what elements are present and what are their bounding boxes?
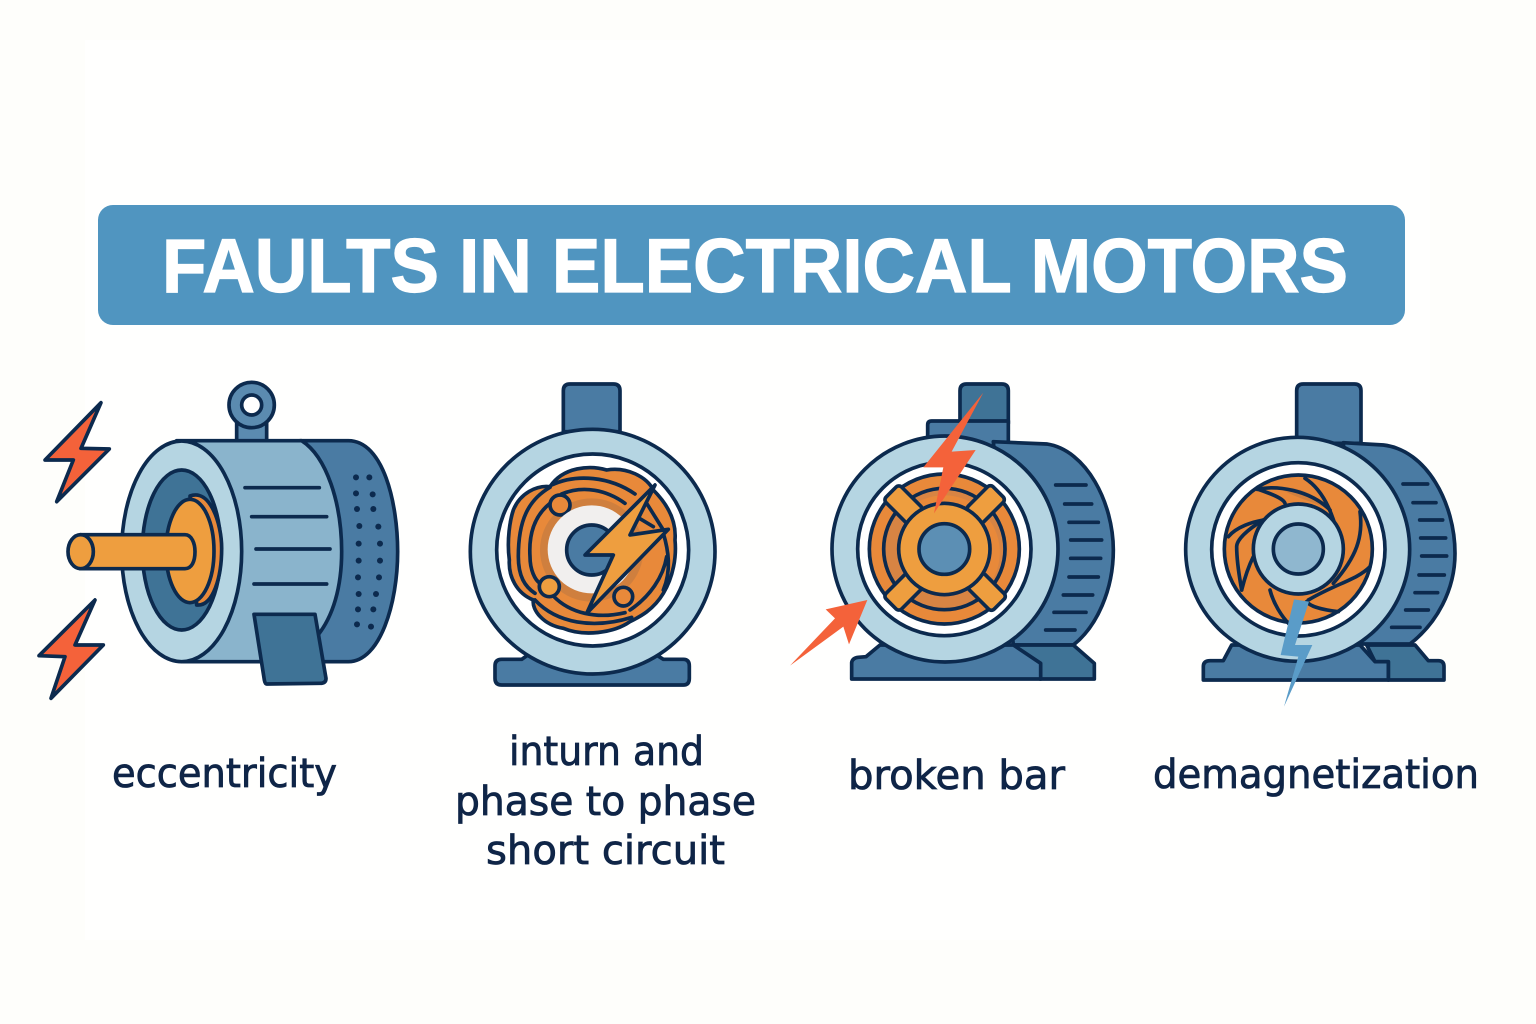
motor 2: inturn and phase to phase short circuit [470, 384, 715, 685]
icon: red lightning bolt [923, 393, 983, 513]
vent lines [1392, 484, 1447, 627]
label: eccentricity: eccentricity [112, 751, 337, 797]
motor 1: eccentricity [39, 382, 398, 698]
orange rotor [166, 495, 222, 605]
rear housing [1343, 443, 1455, 644]
outer ring [832, 436, 1058, 662]
base [495, 630, 689, 685]
lifting eye [229, 382, 274, 443]
inner opening [142, 470, 221, 630]
label: demagnetization: demagnetization [1153, 752, 1479, 798]
front end ring [122, 441, 242, 662]
title banner: FAULTS IN ELECTRICAL MOTORS [162, 224, 1348, 309]
motor rear housing with vents [287, 441, 398, 662]
arrow: red impact arrow [790, 600, 867, 666]
motor 4: demagnetization [1186, 384, 1455, 707]
inner opening [497, 454, 689, 646]
inner opening [1212, 463, 1385, 636]
label: inturn and phase to phase short circuit: phase to phase [455, 779, 756, 825]
terminal box [928, 384, 1008, 447]
terminal box [563, 384, 620, 432]
label: inturn and phase to phase short circuit [455, 729, 756, 874]
inner opening [858, 462, 1031, 636]
swirled copper rotor [1224, 475, 1372, 625]
icon: blue lightning bolt [1281, 599, 1312, 707]
icon: orange lightning bolt [585, 485, 668, 613]
outer ring [1186, 437, 1410, 661]
title banner [98, 205, 1405, 325]
terminal box [1297, 384, 1361, 443]
label: inturn and phase to phase short circuit: inturn and [509, 729, 704, 775]
motor 3: broken bar [790, 384, 1113, 679]
icon: lower red lightning bolt [39, 600, 103, 698]
central rotor [548, 505, 636, 593]
icon: upper red lightning bolt [45, 403, 109, 502]
label: inturn and phase to phase short circuit: short circuit [486, 828, 725, 874]
motor foot [254, 614, 326, 684]
vent lines [1046, 485, 1102, 630]
copper windings [508, 468, 675, 633]
orange shaft [68, 535, 195, 569]
motor mid body with cooling lines [177, 441, 342, 662]
base [852, 645, 1094, 679]
rear housing [993, 442, 1113, 645]
outer ring [470, 429, 715, 674]
label: broken bar: broken bar [848, 753, 1066, 799]
rotor with bars [869, 474, 1019, 624]
base [1203, 645, 1444, 680]
